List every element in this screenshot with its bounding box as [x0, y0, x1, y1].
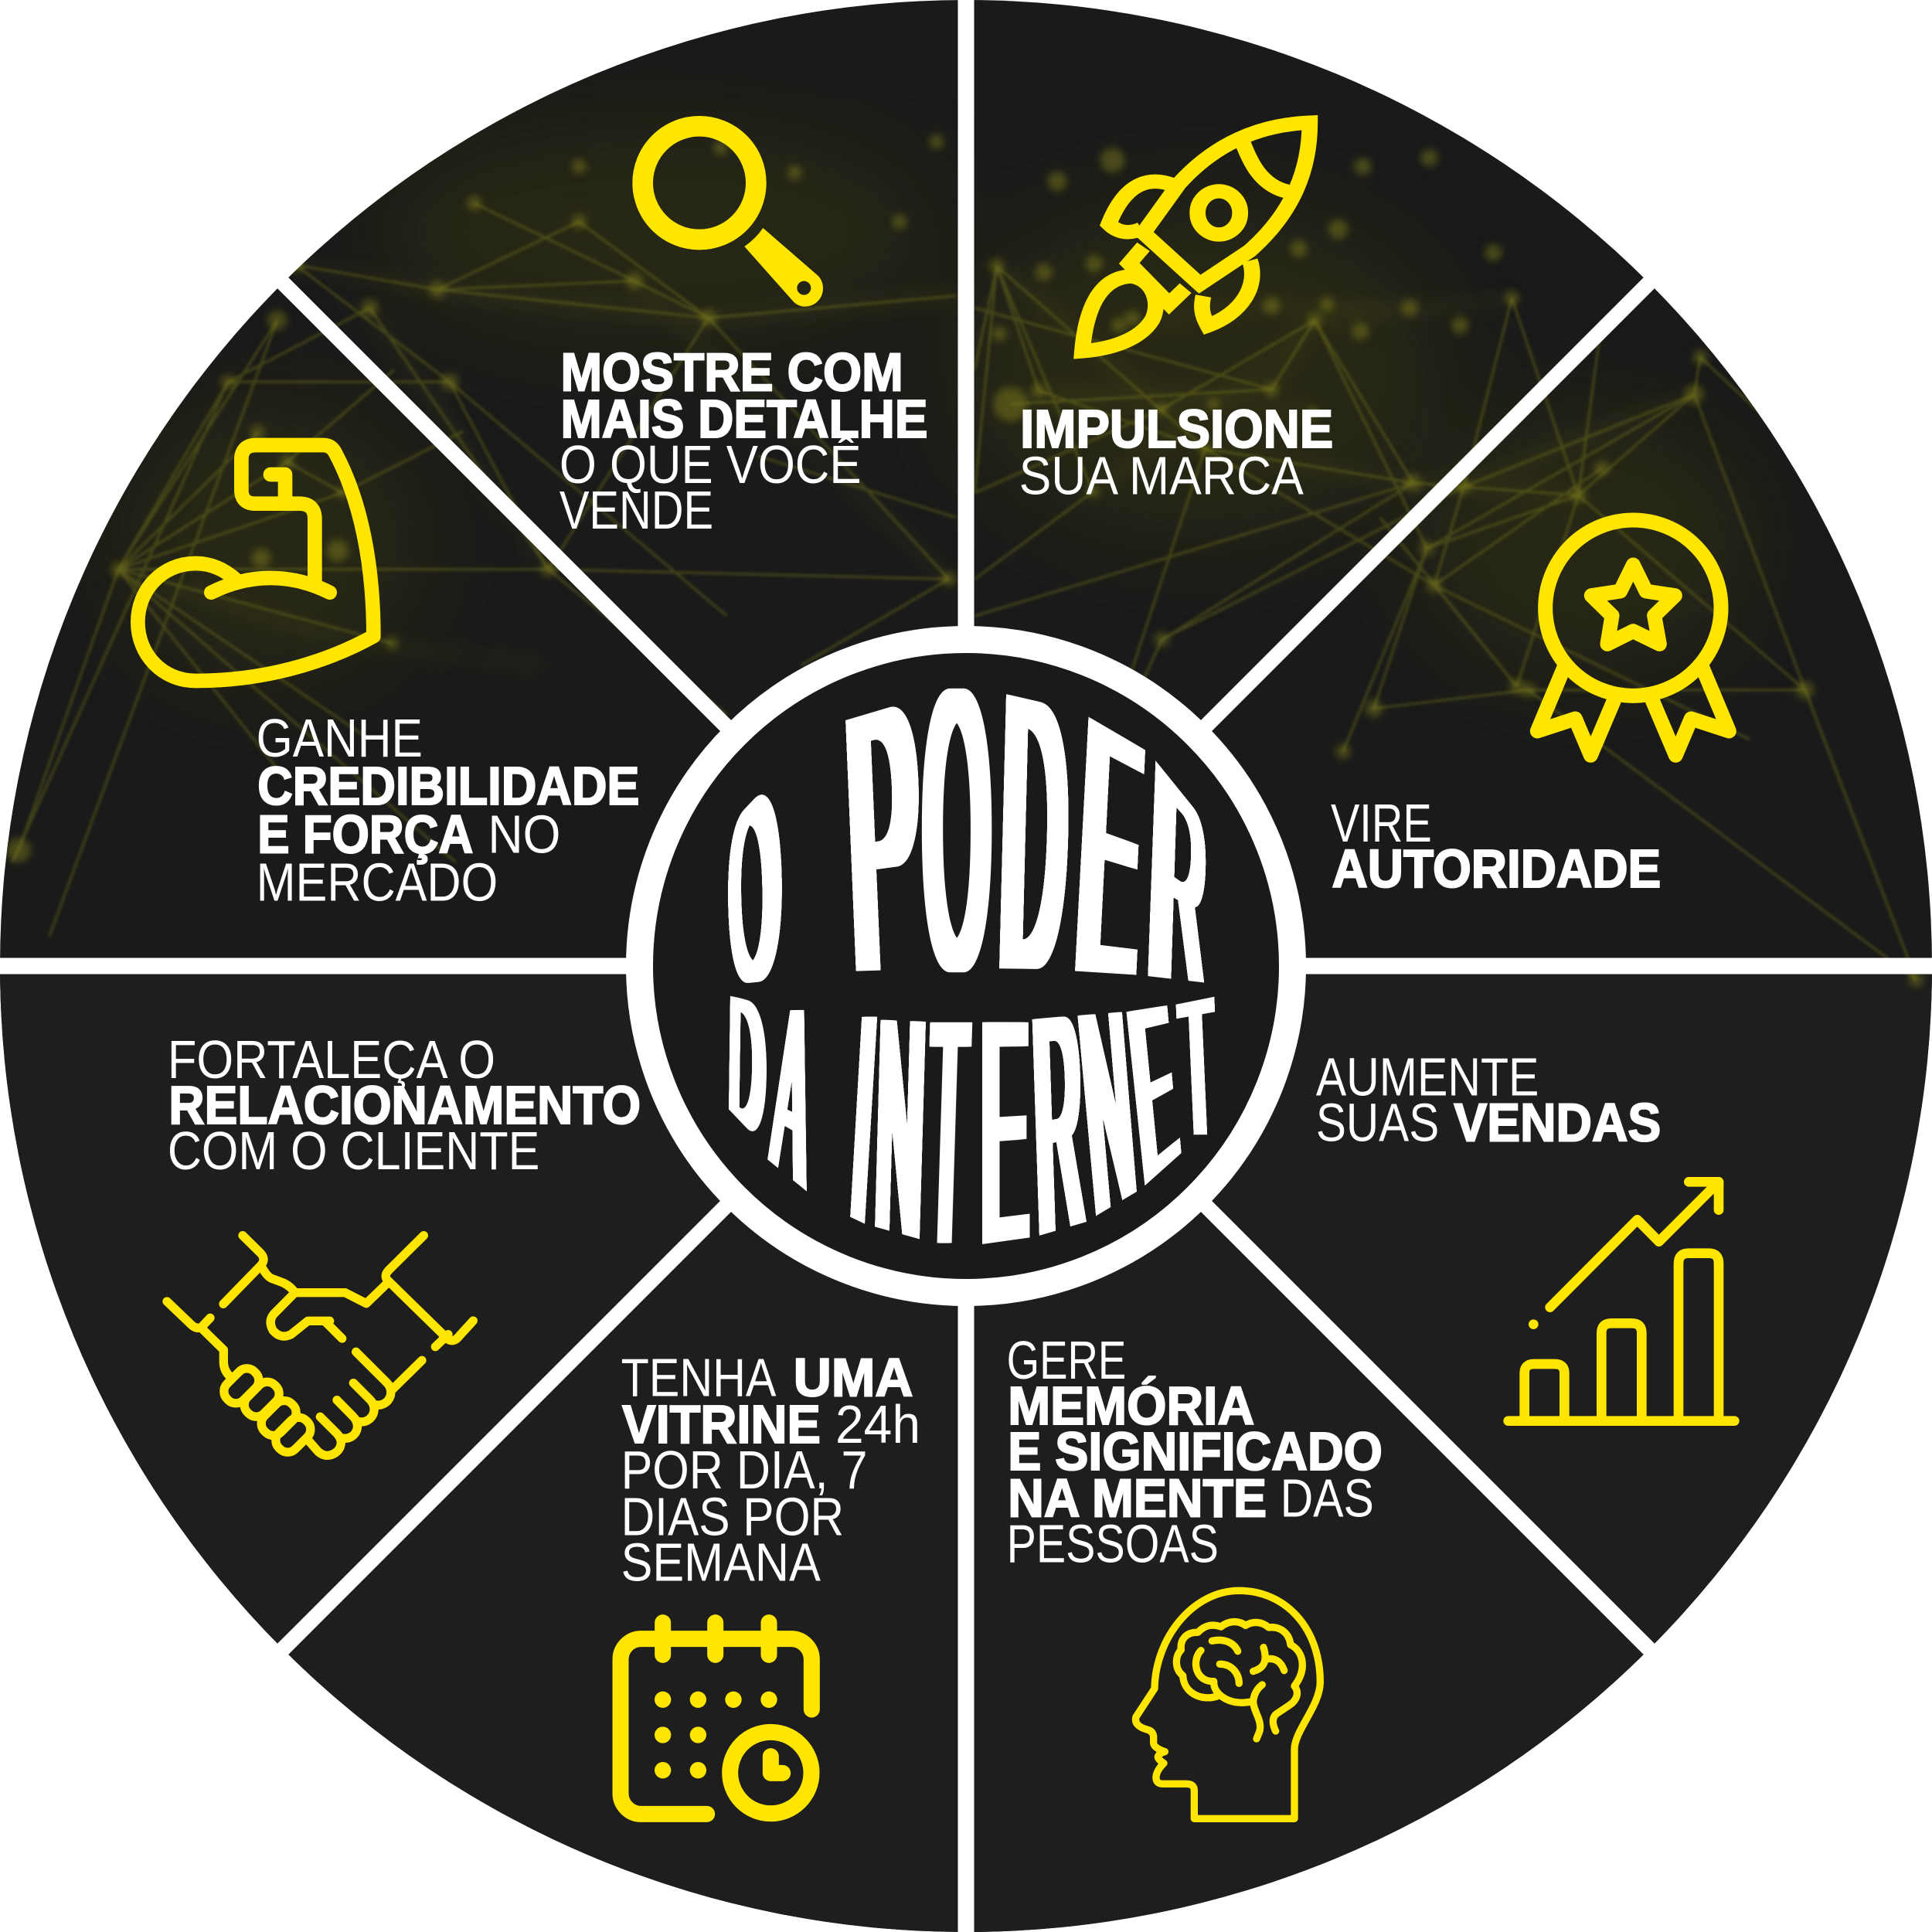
text: impulsione sua marca — [1019, 399, 1333, 505]
text: fortaleca o relacionamento: FORTALEÇA O — [168, 1029, 495, 1090]
hub title: O PODER DA INTERNET: N — [873, 954, 928, 1308]
text: aumente suas vendas: AUMENTE — [1316, 1046, 1539, 1107]
text: gere memoria e significado: MEMÓRIA — [1008, 1376, 1254, 1436]
text: tenha uma vitrine 24h — [621, 1347, 920, 1593]
text: fortaleca o relacionamento — [168, 1029, 641, 1181]
text: ganhe credibilidade: CREDIBILIDADE — [257, 756, 639, 816]
hub title: O PODER DA INTERNET: O — [727, 719, 784, 1043]
text: tenha uma vitrine 24h: POR DIA, 7 — [621, 1440, 867, 1500]
hub title: O PODER DA INTERNET: P — [842, 619, 928, 1056]
text: mostre com mais detalhe: O QUE VOCÊ — [560, 434, 861, 495]
hub title: O PODER DA INTERNET: O — [924, 607, 989, 1056]
text: tenha uma vitrine 24h: TENHA — [621, 1347, 777, 1407]
icon: head with brain — [1135, 1590, 1320, 1818]
text: gere memoria e significado: DAS — [1281, 1468, 1374, 1529]
icon: medal with star — [1537, 520, 1729, 755]
text: tenha uma vitrine 24h: SEMANA — [621, 1532, 821, 1593]
text: gere memoria e significado: PESSOAS — [1007, 1514, 1219, 1574]
text: tenha uma vitrine 24h: 24h — [835, 1394, 920, 1454]
hub title: O PODER DA INTERNET: I — [846, 951, 882, 1288]
text: ganhe credibilidade: MERCADO — [257, 852, 498, 913]
hub title: O PODER DA INTERNET: D — [997, 611, 1070, 1057]
icon: growth chart — [1509, 1182, 1734, 1421]
text: ganhe credibilidade: NO — [488, 804, 560, 864]
text: aumente suas vendas: VENDAS — [1454, 1092, 1661, 1152]
text: mostre com mais detalhe — [560, 342, 928, 540]
text: fortaleca o relacionamento: COM O CLIENTE — [168, 1121, 539, 1181]
text: aumente suas vendas: SUAS — [1316, 1092, 1439, 1152]
icon: calendar with clock — [621, 1623, 811, 1814]
hub title: O PODER DA INTERNET: A — [767, 951, 821, 1240]
lower half: flat lighter tone — [0, 966, 1932, 1932]
text: mostre com mais detalhe: VENDE — [560, 480, 713, 540]
text: mostre com mais detalhe: MOSTRE COM — [560, 342, 903, 402]
hub title: O PODER DA INTERNET — [727, 607, 1219, 1315]
text: ganhe credibilidade: E FORÇA — [257, 804, 473, 864]
text: tenha uma vitrine 24h: VITRINE — [622, 1394, 821, 1454]
sector texts — [168, 342, 1661, 1593]
text: tenha uma vitrine 24h: UMA — [794, 1347, 913, 1407]
hub title: O PODER DA INTERNET: D — [728, 961, 767, 1190]
hub title: O PODER DA INTERNET: E — [982, 954, 1027, 1315]
central hub ring — [640, 640, 1292, 1292]
hub title: O PODER DA INTERNET: R — [1145, 697, 1208, 1049]
text: impulsione sua marca: SUA MARCA — [1019, 445, 1304, 505]
hub title: O PODER DA INTERNET: T — [1177, 956, 1219, 1179]
hub title: O PODER DA INTERNET: T — [924, 954, 971, 1314]
text: ganhe credibilidade: GANHE — [257, 708, 423, 768]
text: gere memoria e significado — [1007, 1330, 1383, 1574]
icon: magnifying glass — [643, 126, 823, 307]
text: vire autoridade: AUTORIDADE — [1332, 838, 1661, 899]
hub title: O PODER DA INTERNET: E — [1070, 641, 1148, 1056]
hub title: O PODER DA INTERNET: R — [1030, 951, 1087, 1304]
text: vire autoridade: VIRE — [1331, 793, 1432, 853]
text: mostre com mais detalhe: MAIS DETALHE — [560, 389, 928, 449]
text: vire autoridade — [1331, 793, 1661, 899]
icon: rocket — [1082, 123, 1310, 351]
icon: flexed arm — [138, 445, 373, 681]
text: gere memoria e significado: E SIGNIFICADO — [1008, 1421, 1383, 1481]
text: fortaleca o relacionamento: RELACIONAMENTO — [168, 1075, 641, 1135]
hub title: O PODER DA INTERNET: E — [1120, 953, 1184, 1236]
hub title: O PODER DA INTERNET: N — [1071, 950, 1141, 1277]
text: gere memoria e significado: NA MENTE — [1008, 1468, 1267, 1529]
icon: handshake — [167, 1236, 473, 1457]
text: aumente suas vendas — [1316, 1046, 1661, 1152]
text: tenha uma vitrine 24h: DIAS POR — [621, 1487, 844, 1547]
text: impulsione sua marca: IMPULSIONE — [1020, 399, 1333, 459]
text: gere memoria e significado: GERE — [1007, 1330, 1126, 1390]
text: ganhe credibilidade — [257, 708, 639, 913]
